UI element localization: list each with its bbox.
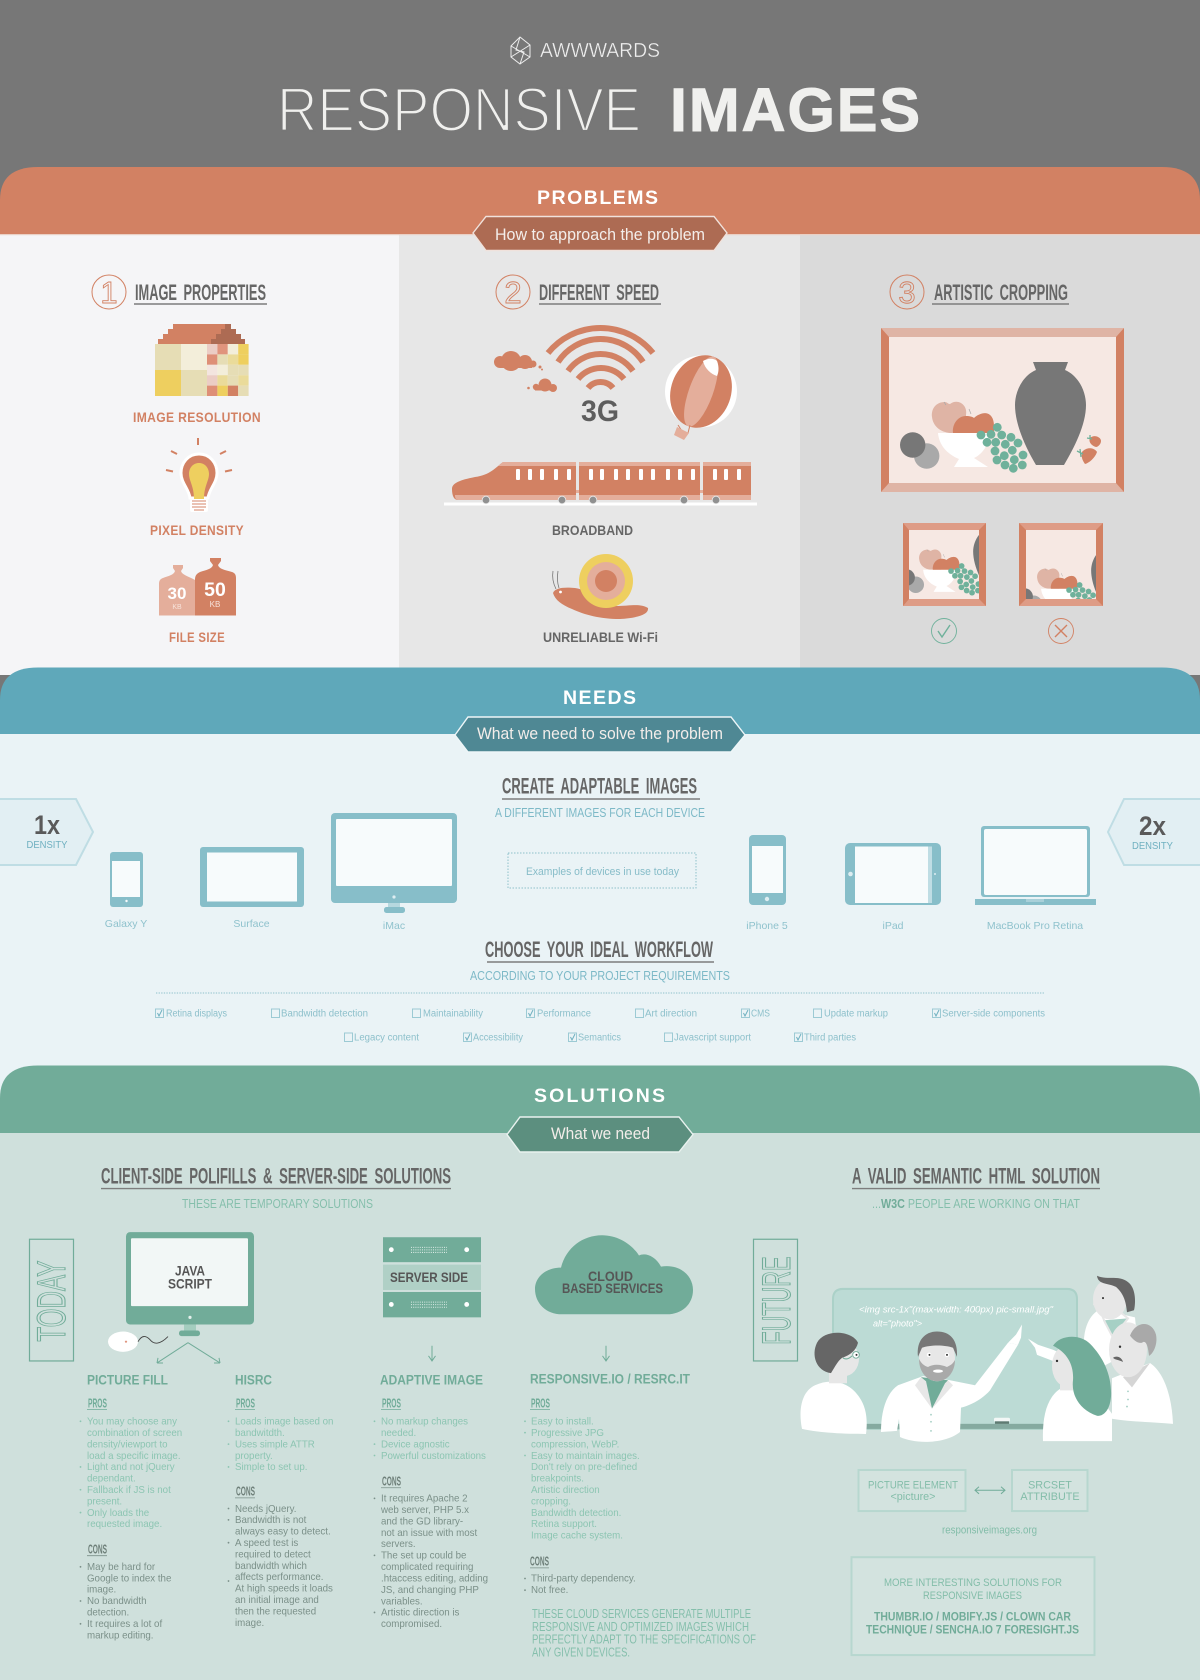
column: hisrc: required to detect bbox=[235, 1549, 311, 1560]
banner: needs bbox=[0, 668, 1200, 752]
number 3 badge: 3 bbox=[898, 275, 916, 310]
illustration: team at blackboard bbox=[801, 1276, 1173, 1442]
device: iphone 5 bbox=[746, 835, 788, 932]
heading: image properties bbox=[134, 280, 267, 305]
checklist: workflow options: Maintainability bbox=[423, 1008, 483, 1020]
column: hisrc: then the requested bbox=[235, 1606, 316, 1617]
column: hisrc: Bandwidth is not bbox=[235, 1515, 307, 1526]
icon: pixelated house bbox=[155, 324, 249, 396]
column: picture fill: Only loads the bbox=[87, 1508, 150, 1519]
note: cloud services: PERFECTLY ADAPT TO THE SPECIFICATIONS OF bbox=[532, 1633, 756, 1647]
column: hisrc: CONS bbox=[236, 1483, 255, 1499]
checklist: workflow options: Retina displays bbox=[166, 1008, 227, 1020]
person: top right man bbox=[1084, 1276, 1138, 1368]
checklist: workflow options: Legacy content bbox=[354, 1032, 419, 1044]
column: picture fill: Light and not jQuery bbox=[87, 1462, 175, 1473]
badge: 2x density bbox=[1108, 799, 1200, 865]
link text: responsiveimages.org: responsiveimages.org bbox=[942, 1524, 1037, 1536]
column: responsive.io: RESPONSIVE.IO / RESRC.IT bbox=[530, 1370, 690, 1386]
column: responsive.io: PROS bbox=[531, 1396, 550, 1411]
badge: 1x density: 1x bbox=[34, 810, 60, 840]
column: hisrc: Loads image based on bbox=[235, 1416, 333, 1428]
heading: artistic cropping: ARTISTIC CROPPING bbox=[934, 280, 1068, 305]
column: adaptive image: .htaccess editing, adding bbox=[381, 1573, 488, 1585]
icon: file size weights bbox=[159, 558, 236, 616]
subheading: THESE ARE TEMPORARY SOLUTIONS bbox=[182, 1197, 373, 1211]
banner: solutions: SOLUTIONS bbox=[534, 1085, 665, 1107]
heading: different speed bbox=[539, 280, 661, 305]
tab: what we need bbox=[507, 1117, 693, 1152]
tab: how to approach the problem bbox=[473, 216, 727, 250]
column: hisrc: an initial image and bbox=[235, 1595, 319, 1606]
column: responsive.io: Image cache system. bbox=[531, 1531, 623, 1542]
icon: file size weights: KB bbox=[210, 600, 220, 609]
box: more solutions: TECHNIQUE / SENCHA.IO 7 FORESIGHT.JS bbox=[866, 1624, 1079, 1636]
note: cloud services bbox=[532, 1607, 756, 1659]
tag: today bbox=[29, 1239, 74, 1361]
column: adaptive image: Artistic direction is bbox=[381, 1608, 459, 1619]
icon: cloud: CLOUD bbox=[588, 1269, 633, 1284]
subheading: w3c: ...W3C PEOPLE ARE WORKING ON THAT bbox=[872, 1197, 1080, 1211]
device: ipad bbox=[845, 843, 941, 932]
column: responsive.io: Don't rely on pre-defined bbox=[531, 1462, 637, 1473]
box: srcset attribute: SRCSET bbox=[1028, 1480, 1072, 1492]
box: more solutions bbox=[852, 1557, 1094, 1655]
column: adaptive image bbox=[374, 1371, 488, 1630]
tag: future: FUTURE bbox=[754, 1256, 799, 1345]
column: responsive.io: Easy to install. bbox=[531, 1416, 594, 1428]
column: picture fill: density/viewport to bbox=[87, 1439, 168, 1450]
column: adaptive image: Powerful customizations bbox=[381, 1451, 486, 1462]
box: picture element: PICTURE ELEMENT bbox=[868, 1480, 958, 1492]
icon: check bbox=[932, 618, 956, 644]
column: picture fill: Fallback if JS is not bbox=[87, 1485, 171, 1496]
banner: solutions bbox=[0, 1066, 1200, 1152]
device: surface: Surface bbox=[233, 918, 270, 930]
arrow: server to adaptive image bbox=[428, 1346, 436, 1361]
icon: file size weights: 50 bbox=[204, 579, 226, 601]
icon: mouse bbox=[108, 1332, 168, 1352]
column: hisrc: property. bbox=[235, 1451, 273, 1462]
badge: 2x density: 2x bbox=[1139, 811, 1166, 841]
column: responsive.io: Bandwidth detection. bbox=[531, 1508, 621, 1519]
panel: problems column 3 bbox=[800, 230, 1200, 675]
icon: awwwards logo bbox=[511, 37, 530, 64]
icon: file size weights: 30 bbox=[168, 584, 186, 603]
column: adaptive image: The set up could be bbox=[381, 1551, 467, 1562]
column: picture fill: present. bbox=[87, 1496, 122, 1507]
label: unreliable wifi: UNRELIABLE Wi-Fi bbox=[543, 629, 658, 645]
column: picture fill: PROS bbox=[88, 1396, 107, 1411]
heading: create adaptable images: CREATE ADAPTABLE IMAGES bbox=[502, 774, 697, 798]
arrow: double headed bbox=[975, 1487, 1005, 1494]
column: picture fill: No bandwidth bbox=[87, 1596, 146, 1607]
column: responsive.io: Retina support. bbox=[531, 1519, 597, 1530]
icon: clouds bbox=[494, 351, 557, 392]
subheading: ACCORDING TO YOUR PROJECT REQUIREMENTS bbox=[470, 969, 730, 983]
column: picture fill: Google to index the bbox=[87, 1573, 172, 1584]
column: hisrc: Simple to set up. bbox=[235, 1462, 307, 1473]
column: adaptive image: Device agnostic bbox=[381, 1439, 450, 1450]
column: responsive.io: Third-party dependency. bbox=[531, 1574, 636, 1585]
tab: what we need to solve the problem bbox=[455, 717, 745, 752]
checklist: workflow options: Performance bbox=[537, 1008, 591, 1020]
label: pixel density: PIXEL DENSITY bbox=[150, 522, 244, 538]
column: adaptive image: and the GD library- bbox=[381, 1516, 463, 1527]
column: picture fill: dependant. bbox=[87, 1474, 136, 1485]
column: adaptive image: compromised. bbox=[381, 1619, 442, 1630]
column: picture fill: load a specific image. bbox=[87, 1451, 181, 1462]
checklist: workflow options: Bandwidth detection bbox=[281, 1008, 368, 1020]
checklist: workflow options: CMS bbox=[751, 1008, 770, 1020]
checklist: workflow options: Update markup bbox=[824, 1008, 888, 1020]
tag: future bbox=[754, 1239, 799, 1361]
note: examples of devices bbox=[508, 853, 696, 888]
column: picture fill: It requires a lot of bbox=[87, 1619, 162, 1630]
title bbox=[277, 76, 920, 145]
icon: javascript imac: SCRIPT bbox=[168, 1276, 213, 1291]
box: more solutions: THUMBR.IO / MOBIFY.JS / CLOWN CAR bbox=[874, 1612, 1072, 1624]
icon: cloud bbox=[535, 1235, 693, 1314]
column: hisrc: affects performance. bbox=[235, 1572, 323, 1583]
column: adaptive image: No markup changes bbox=[381, 1416, 468, 1428]
logo wordmark: AWWWARDS bbox=[540, 40, 660, 62]
box: srcset attribute bbox=[1012, 1470, 1088, 1511]
note: examples of devices: Examples of devices in use today bbox=[526, 866, 679, 878]
column: responsive.io: compression, WebP. bbox=[531, 1439, 619, 1450]
column: hisrc: always easy to detect. bbox=[235, 1527, 331, 1538]
column: adaptive image: ADAPTIVE IMAGE bbox=[380, 1371, 483, 1387]
checklist: workflow options: Accessibility bbox=[473, 1032, 523, 1044]
column: adaptive image: needed. bbox=[381, 1428, 416, 1439]
person: woman with long hair bbox=[1028, 1337, 1112, 1441]
box: picture element: <picture> bbox=[891, 1491, 935, 1503]
panel: solutions bbox=[0, 1100, 1200, 1680]
column: responsive.io: cropping. bbox=[531, 1496, 571, 1507]
box: more solutions: RESPONSIVE IMAGES bbox=[923, 1590, 1022, 1602]
tag: today: TODAY bbox=[29, 1261, 74, 1342]
column: hisrc: bandwidth which bbox=[235, 1561, 307, 1572]
column: adaptive image: not an issue with most bbox=[381, 1528, 478, 1539]
checklist: workflow options: Third parties bbox=[804, 1032, 856, 1044]
column: picture fill bbox=[80, 1371, 182, 1641]
note: cloud services: THESE CLOUD SERVICES GENERATE MULTIPLE bbox=[532, 1607, 751, 1621]
panel: needs bbox=[0, 700, 1200, 1100]
label: broadband: BROADBAND bbox=[552, 522, 633, 538]
column: hisrc: image. bbox=[235, 1618, 264, 1629]
column: adaptive image: web server, PHP 5.x bbox=[380, 1505, 469, 1516]
heading: client side: CLIENT-SIDE POLIFILLS & SERVER-SIDE SOLUTIONS bbox=[101, 1163, 451, 1189]
icon: file size weights: KB bbox=[172, 604, 182, 611]
column: picture fill: image. bbox=[87, 1585, 116, 1596]
picture: bad crop bbox=[1019, 523, 1103, 606]
device: macbook bbox=[975, 826, 1096, 932]
device: macbook: MacBook Pro Retina bbox=[987, 920, 1083, 932]
person: bearded presenter bbox=[881, 1324, 1022, 1442]
column: hisrc: HISRC bbox=[235, 1371, 272, 1387]
column: adaptive image: JS, and changing PHP bbox=[381, 1585, 479, 1596]
number 1 badge: 1 bbox=[100, 275, 118, 310]
column: responsive.io: breakpoints. bbox=[531, 1474, 584, 1485]
badge: 1x density bbox=[0, 799, 93, 865]
column: hisrc: Needs jQuery. bbox=[235, 1504, 296, 1515]
column: responsive.io: CONS bbox=[530, 1553, 549, 1569]
heading: different speed: DIFFERENT SPEED bbox=[539, 280, 659, 305]
label: image resolution: IMAGE RESOLUTION bbox=[133, 409, 261, 425]
icon: hot air balloon bbox=[660, 346, 742, 440]
banner: needs: NEEDS bbox=[563, 687, 636, 709]
box: srcset attribute: ATTRIBUTE bbox=[1020, 1491, 1080, 1503]
column: picture fill: markup editing. bbox=[87, 1630, 154, 1641]
banner: problems: PROBLEMS bbox=[537, 187, 658, 209]
icon: light bulb bbox=[166, 438, 232, 512]
column: responsive.io: Artistic direction bbox=[531, 1485, 600, 1496]
number 1 badge bbox=[92, 275, 126, 310]
box: more solutions: MORE INTERESTING SOLUTIONS FOR bbox=[884, 1577, 1062, 1589]
panel: problems column 2 bbox=[399, 230, 800, 675]
device: imac: iMac bbox=[383, 920, 405, 932]
device: ipad: iPad bbox=[882, 920, 904, 932]
badge: 1x density: DENSITY bbox=[26, 839, 68, 851]
note: cloud services: RESPONSIVE AND OPTIMIZED IMAGES WHICH bbox=[532, 1620, 749, 1634]
checklist: workflow options: Art direction bbox=[645, 1008, 697, 1020]
column: responsive.io: Not free. bbox=[531, 1585, 568, 1596]
column: picture fill: You may choose any bbox=[87, 1416, 177, 1428]
column: picture fill: PICTURE FILL bbox=[87, 1371, 168, 1387]
column: adaptive image: variables. bbox=[381, 1596, 423, 1607]
icon: cross bbox=[1048, 618, 1074, 644]
label: 3G: 3G bbox=[581, 395, 619, 428]
panel: problems column 1 bbox=[0, 230, 399, 675]
tab: how to approach the problem: How to approach the problem bbox=[495, 225, 705, 244]
column: adaptive image: servers. bbox=[381, 1539, 416, 1550]
number 2 badge: 2 bbox=[504, 275, 522, 310]
picture: good crop bbox=[903, 523, 986, 606]
person: bald man bbox=[1109, 1322, 1173, 1424]
solutions content area bbox=[29, 1163, 1173, 1659]
arrows: javascript to picture fill and hisrc bbox=[157, 1343, 220, 1363]
number 2 badge bbox=[496, 275, 530, 310]
title: IMAGES bbox=[670, 76, 920, 144]
tab: what we need: What we need bbox=[551, 1124, 650, 1143]
column: adaptive image: PROS bbox=[382, 1396, 401, 1411]
panel: header bbox=[0, 0, 1200, 200]
heading: image properties: IMAGE PROPERTIES bbox=[135, 280, 266, 305]
device: iphone 5: iPhone 5 bbox=[746, 920, 788, 932]
column: adaptive image: CONS bbox=[382, 1473, 401, 1488]
icon: snail bbox=[553, 554, 648, 619]
icon: javascript imac: JAVA bbox=[175, 1264, 205, 1279]
column: picture fill: detection. bbox=[87, 1607, 129, 1619]
checklist: workflow options: Javascript support bbox=[674, 1032, 751, 1044]
device: imac bbox=[331, 813, 457, 932]
icon: bullet train bbox=[444, 462, 757, 506]
checklist: workflow options bbox=[156, 1008, 1045, 1044]
icon: wifi 3G bbox=[548, 328, 653, 388]
column: responsive.io: Easy to maintain images. bbox=[531, 1451, 640, 1462]
icon: server bbox=[383, 1237, 481, 1317]
tab: what we need to solve the problem: What we need to solve the problem bbox=[477, 724, 723, 743]
number 3 badge bbox=[890, 275, 924, 310]
person: man with glasses bbox=[801, 1333, 867, 1434]
column: hisrc: At high speeds it loads bbox=[235, 1584, 333, 1595]
checklist: workflow options: Server-side components bbox=[942, 1008, 1045, 1020]
blackboard: alt="photo"> bbox=[873, 1318, 922, 1329]
picture: full still life bbox=[881, 328, 1124, 492]
banner: problems bbox=[0, 167, 1200, 250]
column: hisrc: Uses simple ATTR bbox=[235, 1439, 315, 1450]
box: picture element bbox=[858, 1470, 966, 1511]
column: adaptive image: complicated requiring bbox=[381, 1562, 473, 1573]
column: picture fill: requested image. bbox=[87, 1519, 162, 1530]
checklist: workflow options: Semantics bbox=[578, 1032, 621, 1044]
blackboard: <img src-1x"(max-width: 400px) pic-small.jpg" bbox=[859, 1304, 1054, 1315]
column: hisrc: bandwitdth. bbox=[235, 1428, 285, 1439]
subheading: A DIFFERENT IMAGES FOR EACH DEVICE bbox=[495, 806, 705, 820]
arrow: cloud to responsive.io bbox=[602, 1346, 610, 1361]
column: hisrc bbox=[228, 1371, 333, 1629]
heading: choose your ideal workflow: CHOOSE YOUR IDEAL WORKFLOW bbox=[485, 937, 713, 962]
column: picture fill: May be hard for bbox=[87, 1562, 156, 1573]
device: galaxy y bbox=[105, 852, 147, 930]
heading: artistic cropping bbox=[932, 280, 1069, 305]
device: galaxy y: Galaxy Y bbox=[105, 918, 147, 930]
column: hisrc: PROS bbox=[236, 1396, 255, 1411]
device: surface bbox=[200, 847, 304, 930]
column: responsive.io: Progressive JPG bbox=[531, 1428, 604, 1439]
label: file size: FILE SIZE bbox=[169, 629, 225, 645]
column: adaptive image: It requires Apache 2 bbox=[381, 1494, 468, 1505]
title: RESPONSIVE bbox=[277, 76, 641, 145]
column: picture fill: combination of screen bbox=[87, 1428, 182, 1439]
icon: javascript imac bbox=[126, 1232, 254, 1336]
icon: server: SERVER SIDE bbox=[390, 1270, 468, 1285]
column: picture fill: CONS bbox=[88, 1542, 107, 1557]
icon: cloud: BASED SERVICES bbox=[562, 1281, 663, 1296]
badge: 2x density: DENSITY bbox=[1132, 840, 1173, 852]
note: cloud services: ANY GIVEN DEVICES. bbox=[532, 1645, 630, 1659]
column: responsive.io bbox=[524, 1370, 690, 1596]
column: hisrc: A speed test is bbox=[235, 1538, 298, 1549]
blackboard bbox=[833, 1289, 1080, 1429]
